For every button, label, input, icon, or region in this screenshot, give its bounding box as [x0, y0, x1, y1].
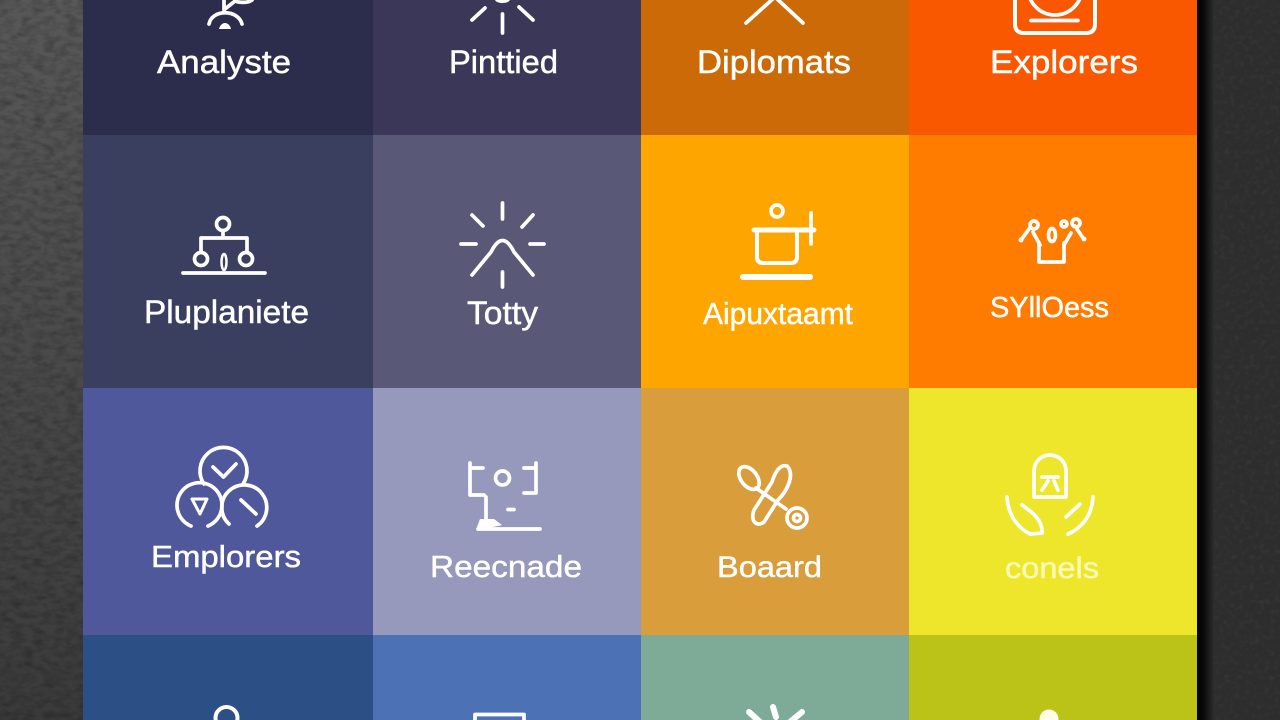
panel: Pluplaniete	[83, 135, 373, 388]
label: Aipuxtaamt: Aipuxtaamt	[703, 296, 853, 331]
panel: Reecnade	[373, 388, 641, 635]
icon: monitor frame	[475, 714, 524, 720]
panel: Emplorers	[83, 388, 373, 635]
icon: hands holding shield	[1007, 455, 1093, 534]
label: Analyste: Analyste	[157, 44, 291, 80]
icon: sun rays	[472, 0, 533, 33]
icon: sun over peak	[461, 203, 544, 287]
icon: sprout leaves	[749, 707, 802, 720]
icon: analyste figure	[209, 0, 252, 29]
panel: bottom fourth	[909, 635, 1197, 720]
panel: SYllOess	[909, 135, 1197, 388]
panel: Totty	[373, 135, 641, 388]
label: Diplomats: Diplomats	[697, 44, 851, 80]
icon: podium speaker	[743, 205, 814, 277]
panel: Pinttied	[373, 0, 641, 135]
panel: bottom left	[83, 635, 373, 720]
label: Reecnade: Reecnade	[430, 549, 582, 584]
icon: scissors	[735, 463, 807, 528]
icon: people cluster	[1018, 219, 1086, 262]
icon: network tree	[183, 218, 265, 273]
label: conels: conels	[1005, 552, 1099, 585]
label: Pinttied: Pinttied	[449, 44, 558, 80]
panel: Aipuxtaamt	[641, 135, 909, 388]
icon: three circles	[177, 447, 267, 526]
panel: Diplomats	[641, 0, 909, 135]
panel: bottom third	[641, 635, 909, 720]
icon: person ring	[216, 707, 238, 720]
icon: desk bracket	[470, 463, 540, 530]
panel: conels	[909, 388, 1197, 635]
panel: Analyste	[83, 0, 373, 135]
label: Totty: Totty	[467, 295, 538, 331]
label: Explorers: Explorers	[990, 44, 1138, 80]
panel: bottom second	[373, 635, 641, 720]
label: SYllOess: SYllOess	[990, 292, 1109, 324]
icon: crossed chevron	[746, 0, 803, 23]
label: Boaard: Boaard	[717, 551, 822, 584]
panel: Boaard	[641, 388, 909, 635]
label: Emplorers: Emplorers	[151, 539, 301, 574]
icon: person head	[1040, 710, 1058, 720]
panel: Explorers top	[909, 0, 1197, 135]
icon: camera frame	[1015, 0, 1095, 33]
label: Pluplaniete: Pluplaniete	[144, 294, 309, 330]
